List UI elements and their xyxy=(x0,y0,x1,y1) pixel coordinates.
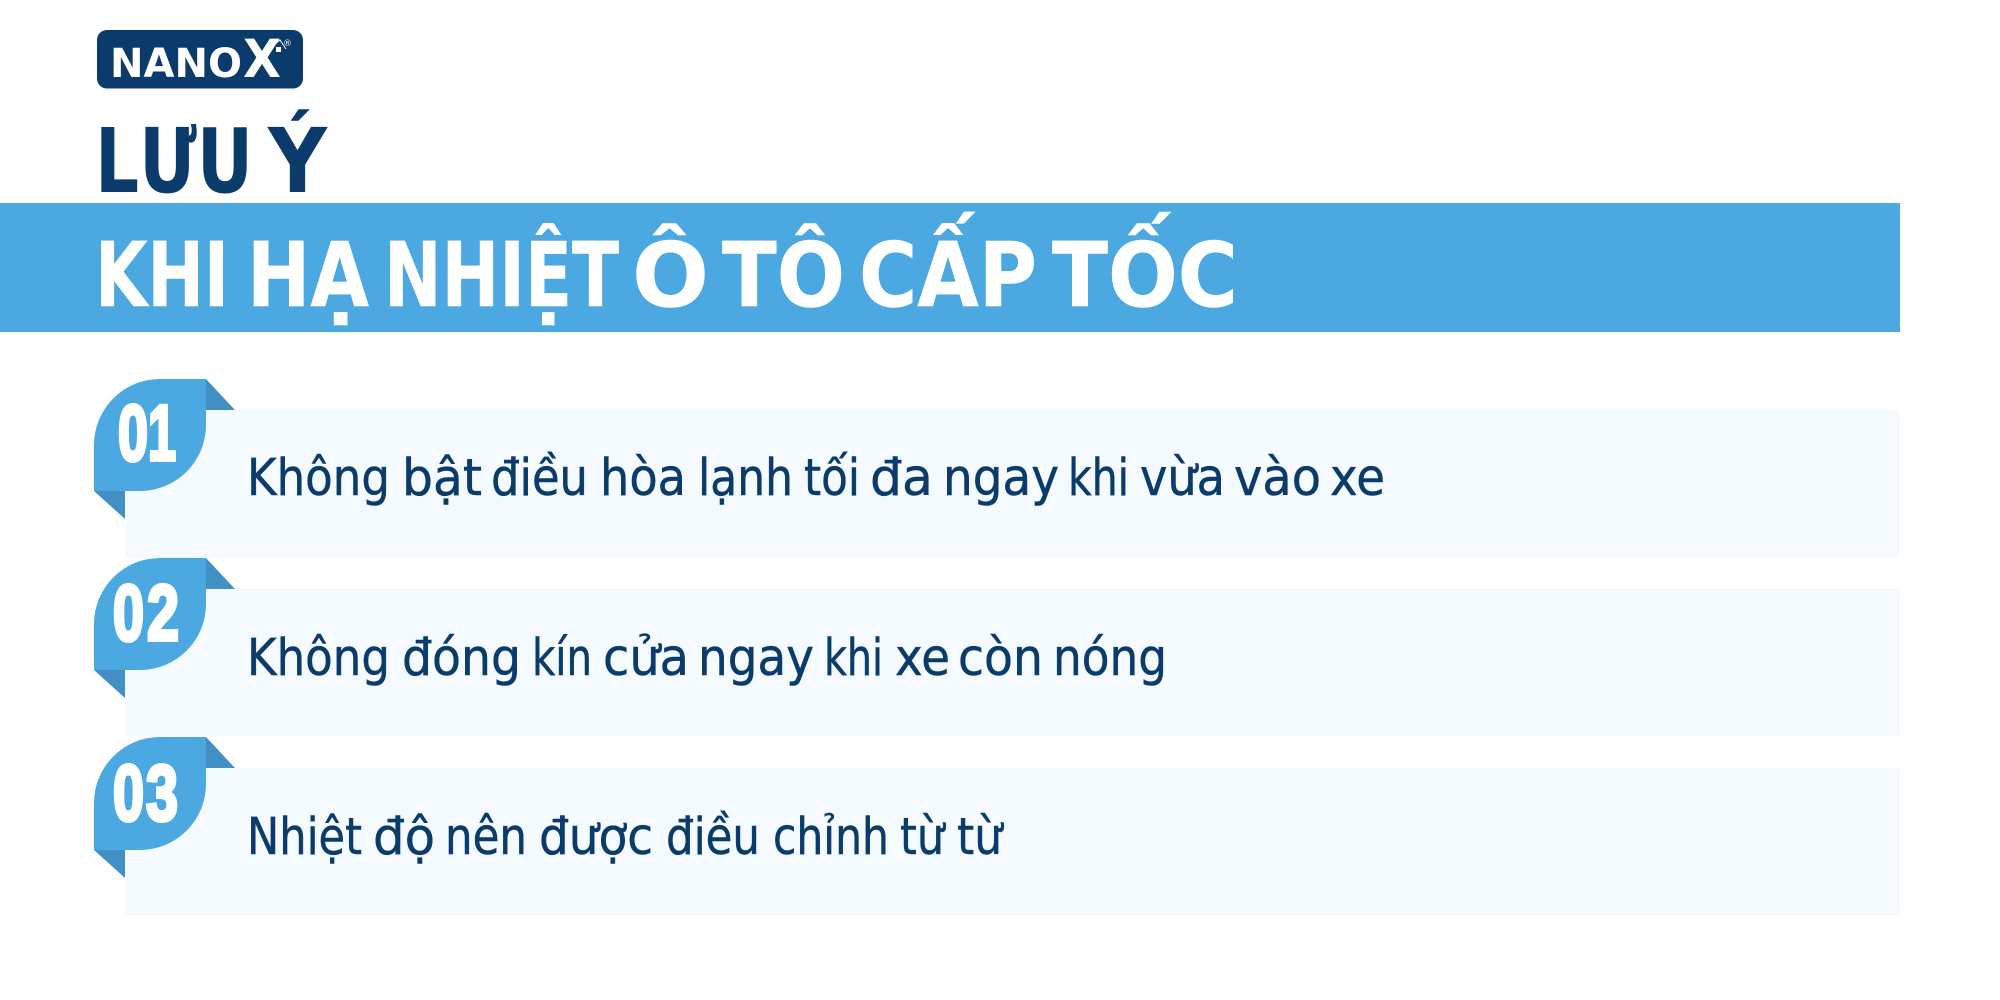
heading: KHI HẠ NHIỆT Ô TÔ CẤP TỐC: NHIỆT xyxy=(384,223,619,327)
logo: NanoX xyxy=(97,29,303,90)
text: item 01: lạnh xyxy=(698,449,793,508)
heading: KHI HẠ NHIỆT Ô TÔ CẤP TỐC: KHI xyxy=(95,223,229,327)
text: item 03: độ xyxy=(373,808,435,867)
text: item 01: ngay xyxy=(943,449,1059,508)
text: item 01: khi xyxy=(1068,449,1129,508)
text: item 01: điều xyxy=(491,449,588,508)
icon: badge 02: 2 xyxy=(147,568,179,657)
text: item 02: còn xyxy=(958,629,1043,688)
heading: LƯU Ý: LƯU xyxy=(95,109,253,213)
text: item 01: xe xyxy=(1330,449,1385,508)
logo: NanoX: X xyxy=(243,29,281,90)
icon: badge 02 xyxy=(94,558,235,698)
text: item 01: bật xyxy=(402,449,482,508)
text: item 03: được xyxy=(539,808,653,867)
text: item 02: xe xyxy=(895,629,950,688)
heading: KHI HẠ NHIỆT Ô TÔ CẤP TỐC xyxy=(95,211,1238,327)
text: item 02 xyxy=(247,629,1167,688)
icon: badge 03: 3 xyxy=(146,748,178,837)
icon: badge 01: 1 xyxy=(148,388,176,477)
icon: badge 03: 0 xyxy=(113,748,144,837)
text: item 03: điều xyxy=(666,808,760,867)
heading: LƯU Ý: Ý xyxy=(267,109,328,213)
text: item 01: tối xyxy=(804,449,860,508)
text: item 03: từ xyxy=(957,808,1004,867)
icon: badge 03 xyxy=(94,737,235,878)
logo: NanoX: ® xyxy=(283,39,292,49)
text: item 03: từ xyxy=(900,808,946,867)
text: item 02: Không xyxy=(247,629,390,688)
text: item 01 xyxy=(247,449,1385,508)
heading: KHI HẠ NHIỆT Ô TÔ CẤP TỐC: TÔ xyxy=(722,223,845,327)
text: item 01: hòa xyxy=(600,449,686,508)
text: item 03: nên xyxy=(445,808,527,867)
logo: NanoX: NANO xyxy=(110,41,242,87)
text: item 01: vào xyxy=(1234,449,1321,508)
text: item 01: vừa xyxy=(1140,449,1225,508)
text: item 03: chỉnh xyxy=(773,808,889,867)
heading: KHI HẠ NHIỆT Ô TÔ CẤP TỐC: TỐC xyxy=(1052,211,1238,327)
icon: badge 01 xyxy=(94,379,235,519)
text: item 02: đóng xyxy=(402,629,521,688)
text: item 02: ngay xyxy=(698,629,814,688)
panel: item 03 xyxy=(94,737,1900,916)
text: item 01: đa xyxy=(870,449,933,508)
text: item 02: khi xyxy=(824,629,883,688)
heading: KHI HẠ NHIỆT Ô TÔ CẤP TỐC: CẤP xyxy=(859,211,1037,327)
icon: badge 01: 0 xyxy=(118,388,148,477)
text: item 03: Nhiệt xyxy=(247,808,362,867)
panel: item 01 xyxy=(94,379,1900,558)
text: item 02: cửa xyxy=(603,629,689,688)
heading band xyxy=(0,203,1900,332)
text: item 01: Không xyxy=(247,449,390,508)
heading: KHI HẠ NHIỆT Ô TÔ CẤP TỐC: Ô xyxy=(632,223,709,327)
text: item 02: nóng xyxy=(1053,629,1167,688)
panel: item 02 xyxy=(94,558,1900,736)
heading: KHI HẠ NHIỆT Ô TÔ CẤP TỐC: HẠ xyxy=(247,223,369,327)
icon: badge 02: 0 xyxy=(113,568,144,657)
text: item 03 xyxy=(247,808,1004,867)
text: item 02: kín xyxy=(532,629,592,688)
